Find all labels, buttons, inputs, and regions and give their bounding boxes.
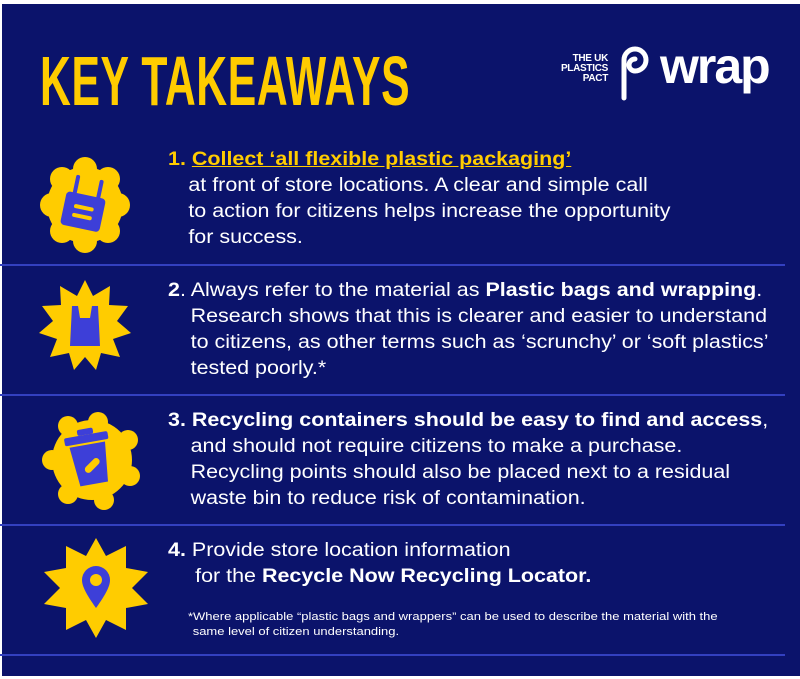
text 4 [168,540,591,587]
title: KEY TAKEAWAYS [40,42,410,120]
text 4: 4. Provide store location information [168,540,511,561]
icon 1: bag on scalloped badge [40,157,130,253]
text 3: waste bin to reduce risk of contamination. [191,488,586,509]
text 2: 2. Always refer to the material as Plastic bags and wrapping. [168,280,762,301]
logo: UK Plastics Pact and wrap: wrap [660,38,769,94]
text 2: Research shows that this is clearer and easier to understand [191,306,767,327]
footnote: same level of citizen understanding. [193,626,399,638]
text 1: at front of store locations. A clear and simple call [188,175,648,196]
text 1: to action for citizens helps increase the opportunity [188,201,670,222]
logo: UK Plastics Pact and wrap: PACT [583,73,608,84]
logo: UK Plastics Pact and wrap: PLASTICS [561,63,608,74]
text 3: and should not require citizens to make a purchase. [191,436,682,457]
text 1 [168,149,670,248]
icon 3: bin on wavy badge [42,412,140,510]
text 3 [168,410,768,509]
icon 4: location pin on starburst [44,538,148,638]
text 2: tested poorly.* [191,358,326,379]
footnote: *Where applicable “plastic bags and wrappers” can be used to describe the material with the [188,611,718,623]
text 1: 1. Collect ‘all flexible plastic packaging’ [168,149,571,170]
icon 2: plastic bag on starburst [39,280,131,370]
text 2: to citizens, as other terms such as ‘scrunchy’ or ‘soft plastics’ [191,332,769,353]
text 2 [168,280,769,379]
text 3: 3. Recycling containers should be easy to find and access, [168,410,768,431]
logo: UK Plastics Pact and wrap [561,38,769,100]
logo: UK Plastics Pact and wrap: THE UK [573,53,608,64]
footnote [188,611,718,638]
text 3: Recycling points should also be placed next to a residual [191,462,730,483]
text 4: for the Recycle Now Recycling Locator. [195,566,591,587]
text 1: for success. [188,227,303,248]
